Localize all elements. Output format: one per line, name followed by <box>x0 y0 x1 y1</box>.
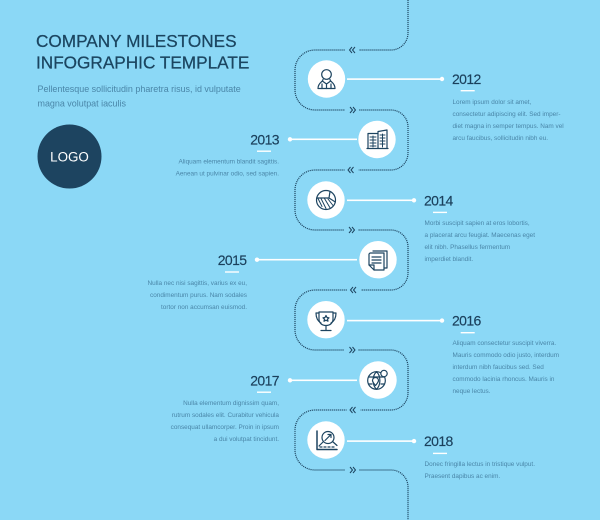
text 2014: elit nibh. Phasellus fermentum <box>424 244 510 251</box>
text 2013 <box>176 158 279 178</box>
text 2014: imperdiet blandit. <box>424 256 473 263</box>
text 2012 <box>452 99 564 142</box>
text 2016: Aliquam consectetur suscipit viverra. <box>452 340 556 347</box>
text 2015 <box>148 280 247 311</box>
subtitle: Pellentesque sollicitudin pharetra risus, id vulputate <box>38 84 241 94</box>
text 2017: a dui volutpat tincidunt. <box>214 436 279 443</box>
text 2016: interdum nibh faucibus sed. Sed <box>452 364 544 371</box>
title: COMPANY MILESTONES <box>36 31 237 51</box>
text 2017: consequat ullamcorper. Proin in ipsum <box>171 424 279 431</box>
milestone 2014 <box>307 181 535 263</box>
title: INFOGRAPHIC TEMPLATE <box>36 52 249 72</box>
title <box>36 31 249 72</box>
text 2018 <box>424 461 535 480</box>
underline 2015 <box>225 271 239 273</box>
text 2018: Praesent dapibus ac enim. <box>424 473 500 480</box>
logo badge <box>38 124 102 188</box>
text 2016: neque lectus. <box>452 388 491 395</box>
milestone 2017 <box>171 361 397 443</box>
year 2017: 2017 <box>250 372 280 388</box>
text 2014: Morbi suscipit sapien at eros lobortis, <box>424 220 530 227</box>
text 2012: arcu faucibus, sollicitudin nibh eu. <box>452 135 548 142</box>
connector 2012 <box>347 77 444 81</box>
icon: growth chart with magnifier <box>307 421 345 459</box>
underline 2016 <box>461 332 475 333</box>
text 2016: Mauris commodo odio justo, interdum <box>452 352 559 359</box>
text 2017: Nulla elementum dignissim quam, <box>183 400 279 407</box>
text 2014: a placerat arcu feugiat. Maecenas eget <box>424 232 535 239</box>
subtitle <box>38 84 241 108</box>
logo badge: LOGO <box>50 150 89 164</box>
year 2016: 2016 <box>452 312 482 328</box>
subtitle: magna volutpat iaculis <box>38 98 126 108</box>
text 2013: Aenean ut pulvinar odio, sed sapien. <box>176 170 279 178</box>
text 2015: Nulla nec nisi sagittis, varius ex eu, <box>148 280 247 287</box>
connector 2016 <box>347 318 444 323</box>
text 2017: rutrum sodales elit. Curabitur vehicula <box>172 412 279 419</box>
text 2015: condimentum purus. Nam sodales <box>150 292 247 299</box>
text 2018: Donec fringilla lectus in tristique vulput. <box>424 461 535 468</box>
connector 2013 <box>288 137 357 142</box>
text 2013: Aliquam elementum blandit sagittis. <box>178 158 279 166</box>
year 2015: 2015 <box>218 252 247 268</box>
text 2012: consectetur adipiscing elit. Sed imper- <box>452 111 560 118</box>
year 2012: 2012 <box>452 71 482 87</box>
direction chevrons <box>348 47 356 473</box>
underline 2012 <box>461 90 475 91</box>
milestone 2016 <box>307 301 559 395</box>
icon: documents <box>359 241 397 278</box>
milestone 2018 <box>307 421 535 480</box>
text 2012: diet magna in semper tempus. Nam vel <box>452 123 564 130</box>
text 2015: tortor non accumsan euismod. <box>161 304 247 311</box>
milestone 2015 <box>148 241 397 311</box>
text 2016 <box>452 340 559 395</box>
text 2017 <box>171 400 279 443</box>
icon: pie chart <box>307 181 345 219</box>
icon: office buildings <box>358 121 396 158</box>
text 2014 <box>424 220 535 263</box>
connector 2017 <box>288 378 357 382</box>
milestone 2013 <box>176 121 396 178</box>
year 2013: 2013 <box>250 132 280 148</box>
underline 2013 <box>257 150 271 152</box>
connector 2015 <box>255 258 357 262</box>
underline 2017 <box>257 392 271 393</box>
text 2012: Lorem ipsum dolor sit amet, <box>452 99 532 106</box>
underline 2018 <box>433 453 447 454</box>
icon: businessman <box>308 60 345 98</box>
icon: globe with pin <box>359 361 397 399</box>
connector 2014 <box>347 198 416 202</box>
milestone 2012 <box>308 60 564 142</box>
dotted winding timeline path <box>295 0 408 520</box>
connector 2018 <box>347 439 416 443</box>
year 2018: 2018 <box>424 433 454 449</box>
year 2014: 2014 <box>424 192 454 208</box>
icon: trophy <box>307 301 345 338</box>
underline 2014 <box>433 212 447 213</box>
text 2016: commodo lacinia rhoncus. Mauris in <box>452 376 555 383</box>
